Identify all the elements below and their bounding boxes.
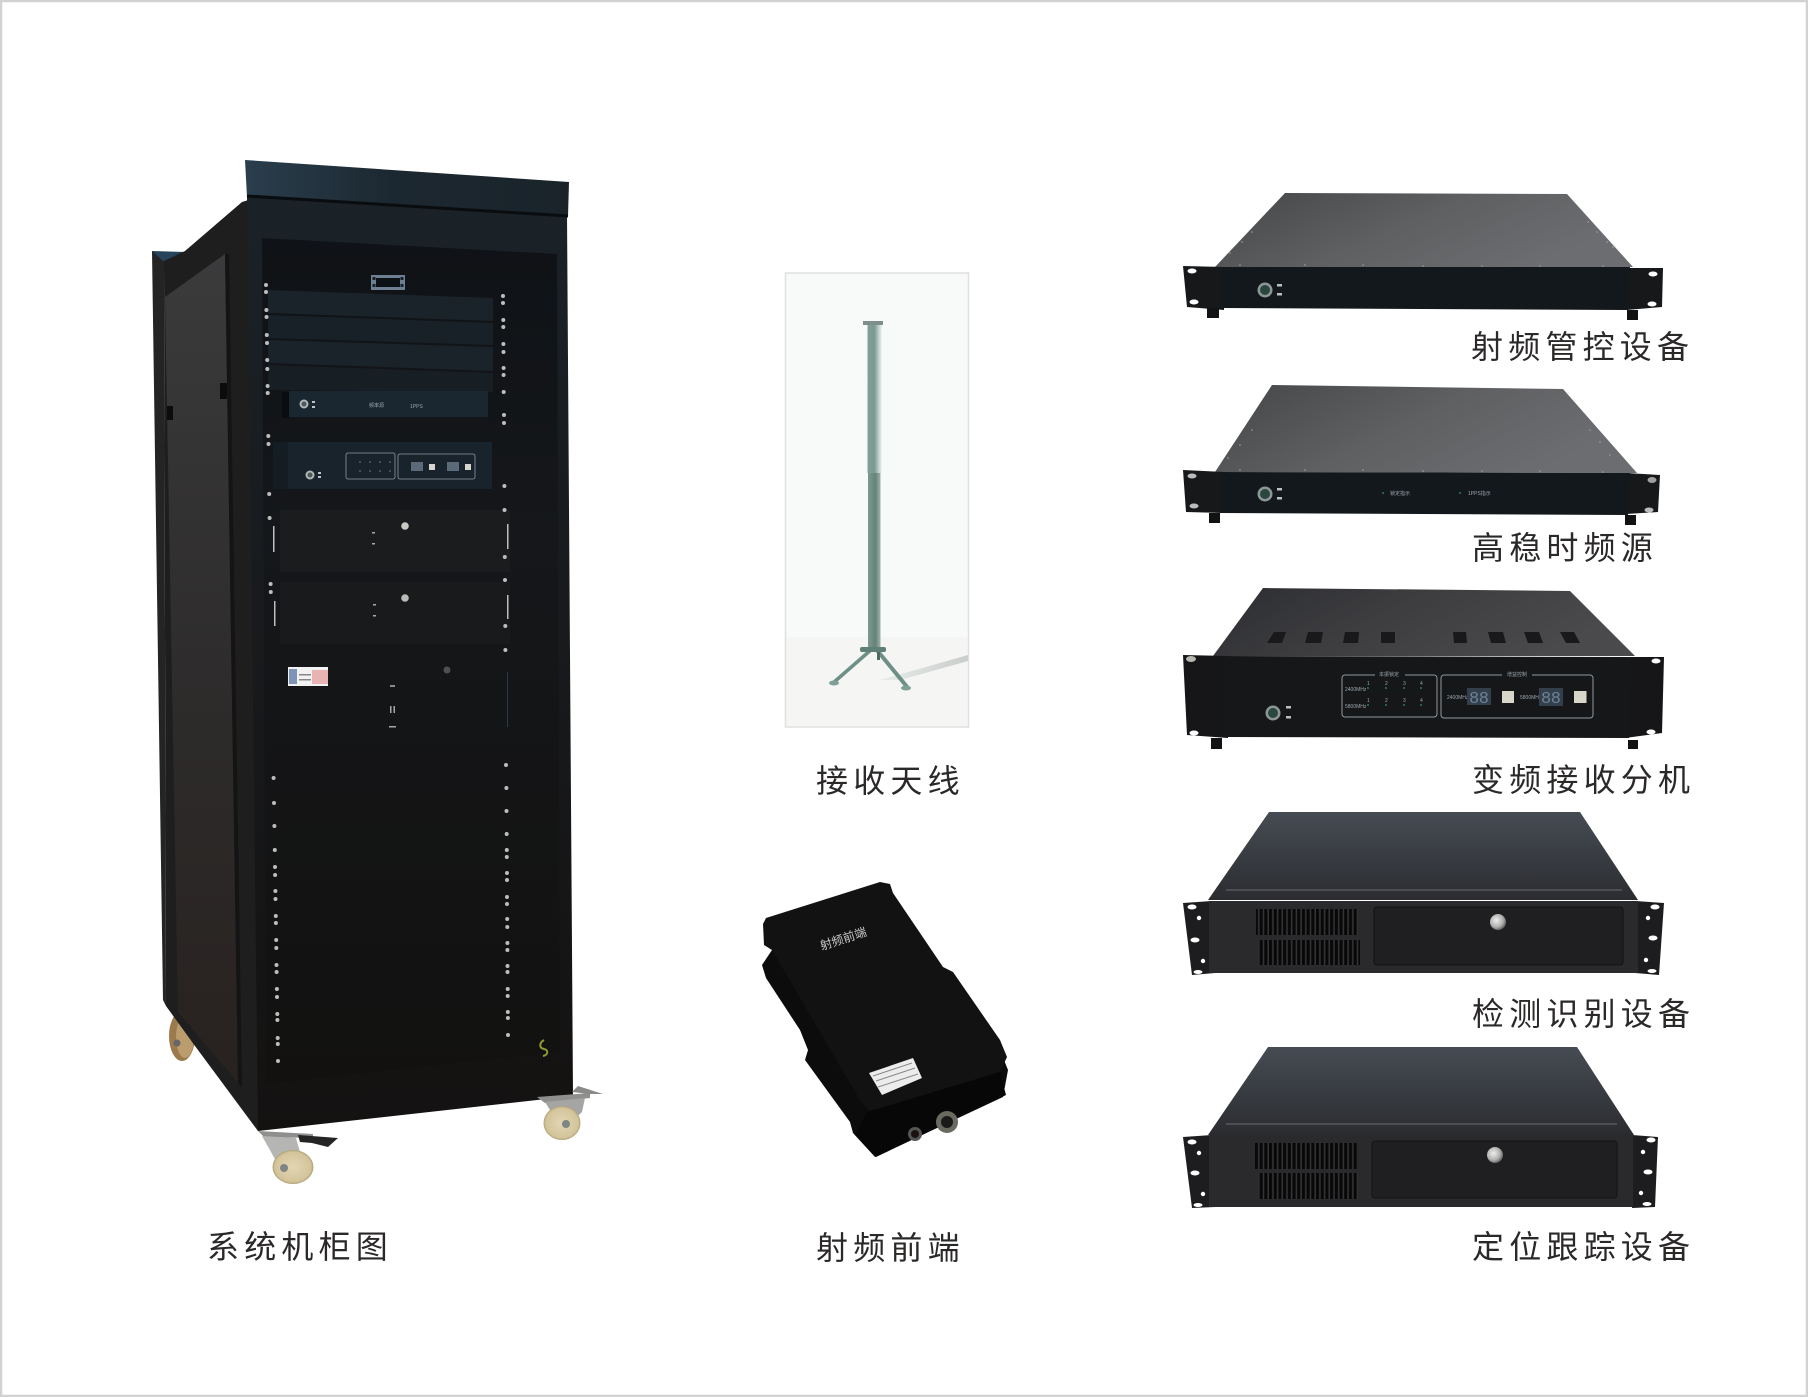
left rail screws <box>266 285 278 1061</box>
front face <box>855 1072 1006 1157</box>
unit: RF control device in rack: 1PPS <box>410 404 423 410</box>
downconverter receiver label: 变频接收分机 <box>1472 762 1695 798</box>
gain control panel: 2400MHz <box>1447 695 1469 701</box>
time frequency source label: 高稳时频源 <box>1472 530 1658 566</box>
rack ears <box>1183 901 1664 975</box>
pole <box>863 321 883 648</box>
lock indicator panel: 3 <box>1403 698 1406 704</box>
drive door <box>1372 1141 1617 1198</box>
lock indicator panel: 1 <box>1367 698 1370 704</box>
RF front end label: 射频前端 <box>816 1230 965 1266</box>
status indicators: 锁定指示 <box>1390 490 1410 497</box>
rack interior <box>262 238 560 1084</box>
cabinet front frame <box>247 197 573 1131</box>
device: detection and identification <box>1183 812 1664 975</box>
device: RF control <box>1183 193 1663 320</box>
top cover <box>1208 812 1638 900</box>
front panel <box>1209 901 1638 973</box>
ventilation slots <box>1256 909 1360 965</box>
status indicators: 1PPS指示 <box>1468 490 1491 497</box>
detection and locating units in rack <box>273 510 510 728</box>
rack ears <box>1183 266 1663 310</box>
gain control panel: 88 <box>1469 690 1489 709</box>
lock <box>1490 914 1506 930</box>
power switch and LEDs <box>1258 282 1282 298</box>
status indicators <box>1382 490 1491 497</box>
cover studs <box>1228 430 1610 472</box>
top cover <box>1208 1047 1634 1135</box>
rack ears <box>1183 470 1660 514</box>
gain control panel: 88 <box>1541 690 1561 709</box>
device: time frequency source <box>1183 385 1660 525</box>
N connector <box>936 1111 958 1133</box>
drive door <box>1374 907 1623 965</box>
device: downconverter receiver <box>1183 588 1664 749</box>
top plate <box>763 882 1007 1112</box>
lower body <box>762 950 1008 1157</box>
power switch and LEDs <box>1258 486 1282 502</box>
system cabinet <box>152 160 603 1184</box>
front panel <box>1220 267 1630 310</box>
receiving antenna panel <box>786 273 968 727</box>
system cabinet label: 系统机柜图 <box>207 1229 393 1265</box>
lock <box>1487 1147 1503 1163</box>
nameplate <box>869 1058 922 1095</box>
ground shadow <box>880 655 968 680</box>
rear left caster <box>169 1011 195 1061</box>
right rail screws <box>503 296 508 1035</box>
unit: RF control device in rack: 频率源 <box>369 402 384 409</box>
positioning and tracking label: 定位跟踪设备 <box>1472 1229 1695 1265</box>
lock indicator panel <box>1342 671 1437 717</box>
feet <box>1211 738 1638 749</box>
lock indicator panel: 4 <box>1420 681 1423 687</box>
device name printed on lid: 射频前端 <box>818 924 868 953</box>
lock indicator panel: 2 <box>1385 698 1388 704</box>
unit: receiver in rack <box>273 442 492 489</box>
feet <box>1207 308 1638 320</box>
gain control panel: 增益控制 <box>1507 671 1527 678</box>
top cover seam <box>1226 889 1622 891</box>
floor tone <box>786 637 968 726</box>
front panel <box>1220 472 1630 515</box>
roof shadow line <box>247 196 568 216</box>
front left caster <box>258 1131 338 1184</box>
front panel <box>1209 1135 1633 1207</box>
cabinet roof panel <box>245 160 569 216</box>
antenna photo background <box>786 273 968 727</box>
rack ears <box>1183 655 1664 738</box>
RF front end device <box>762 882 1008 1157</box>
temperature controller <box>371 275 405 290</box>
cabinet side <box>152 197 258 1131</box>
lock indicator panel: 本振锁定 <box>1379 671 1399 678</box>
top cover seam <box>1226 1123 1617 1125</box>
feet <box>1209 513 1636 525</box>
rack ears <box>1183 1135 1658 1208</box>
unit: RF control device in rack <box>282 391 488 418</box>
asset label sticker <box>288 667 328 686</box>
lock indicator panel: 2 <box>1385 681 1388 687</box>
top cover <box>1215 385 1637 473</box>
top cover <box>1213 588 1635 656</box>
front panel <box>1222 656 1632 738</box>
lock indicator panel: 5800MHz <box>1345 704 1367 710</box>
gain control panel <box>1441 671 1593 718</box>
tripod legs <box>829 647 911 690</box>
lock indicator panel: 1 <box>1367 681 1370 687</box>
cover studs <box>1230 222 1613 266</box>
vents <box>1267 632 1580 643</box>
ground wire <box>540 1040 547 1056</box>
lock indicator panel: 2400MHz <box>1345 687 1367 693</box>
RF control label: 射频管控设备 <box>1471 329 1694 365</box>
detection and identification label: 检测识别设备 <box>1472 996 1695 1032</box>
lock indicator panel: 4 <box>1420 698 1423 704</box>
front right caster <box>537 1086 603 1140</box>
blank panels <box>268 290 493 392</box>
top cover <box>1215 193 1633 267</box>
ventilation slots <box>1255 1143 1358 1199</box>
gain control panel: 5800MHz <box>1520 695 1542 701</box>
device: positioning and tracking <box>1183 1047 1658 1208</box>
power switch and LEDs <box>1266 706 1291 720</box>
round connector <box>908 1127 922 1141</box>
lock indicator panel: 3 <box>1403 681 1406 687</box>
receiving antenna label: 接收天线 <box>816 763 965 799</box>
